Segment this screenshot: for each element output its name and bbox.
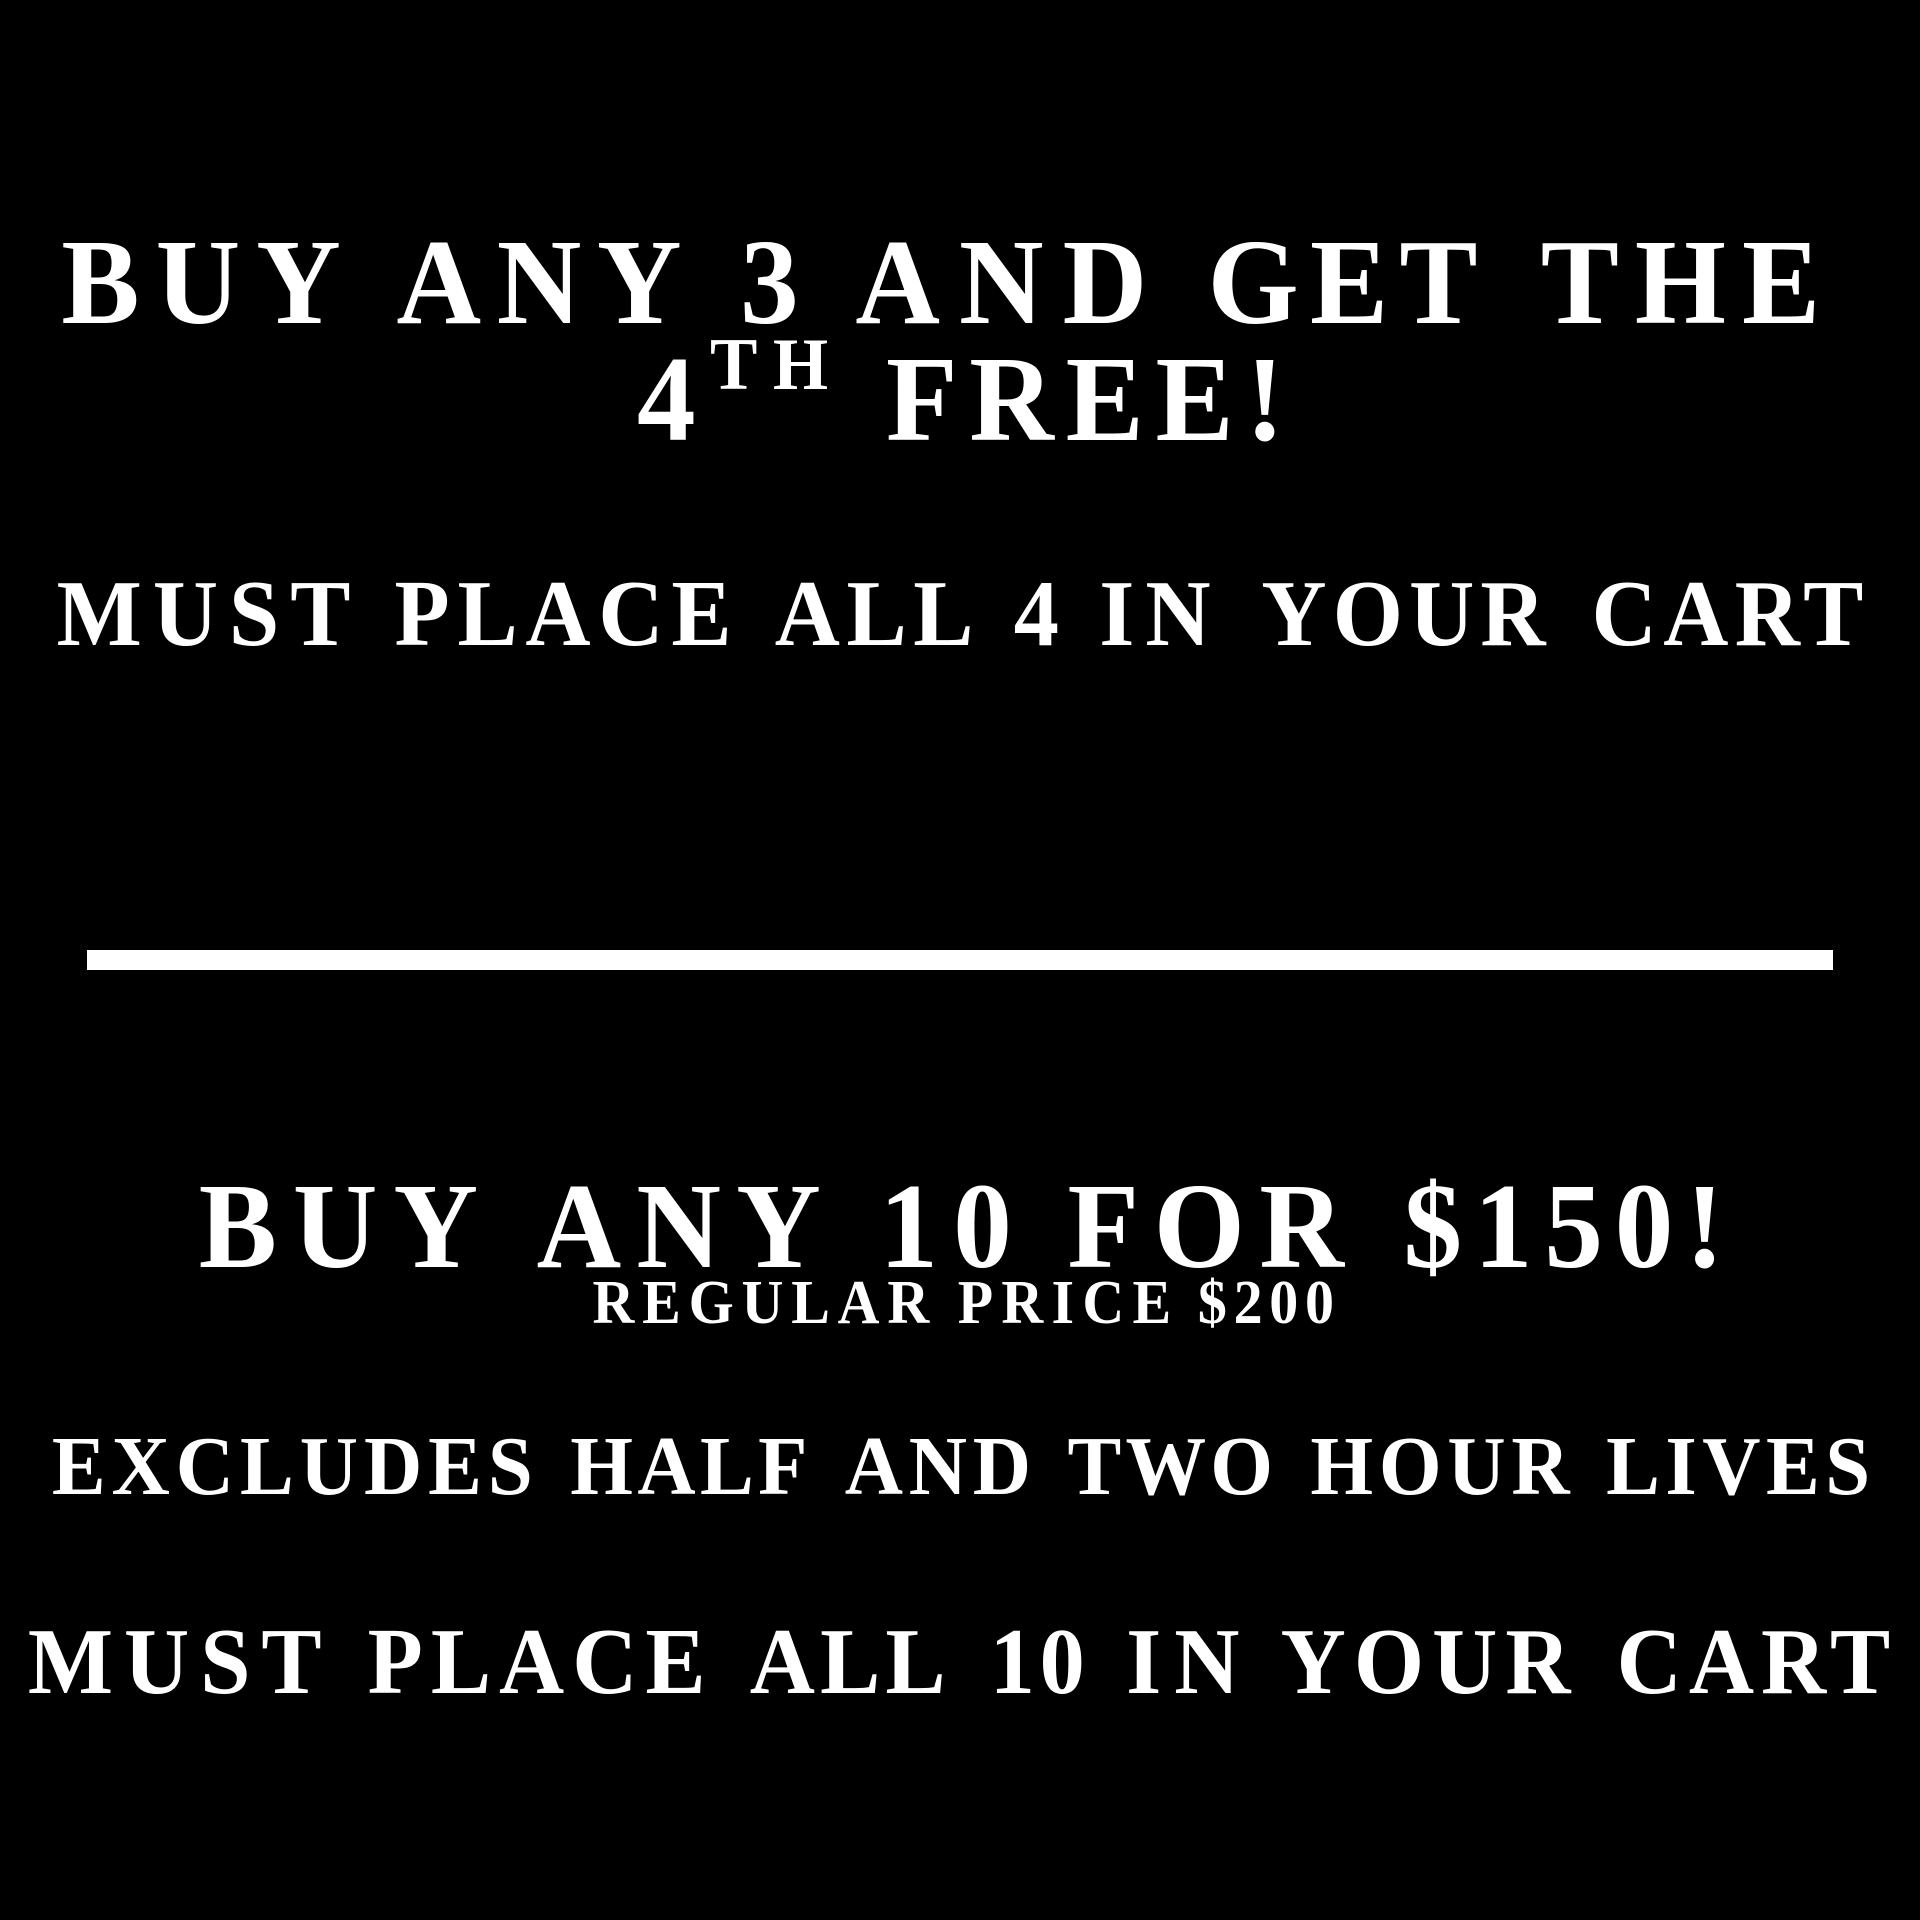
text: regular price: [592, 1268, 1334, 1338]
heading: buy any 3 offer line 2: [637, 323, 1284, 467]
text: must place all 4: YOUR: [1261, 561, 1547, 665]
text: must place all 10: MUST: [28, 1609, 322, 1713]
text: exclusions: EXCLUDES: [52, 1420, 533, 1512]
heading: buy any 10 offer: BUY: [199, 1158, 478, 1294]
text: must place all 4: [57, 561, 1863, 665]
heading: buy any 3 offer line 2: FREE!: [886, 331, 1284, 467]
text: must place all 10: CART: [1617, 1609, 1890, 1713]
heading: buy any 3 offer line 1: THE: [1541, 214, 1820, 350]
text: exclusions: HOUR: [1310, 1420, 1571, 1512]
heading: buy any 10 offer: ANY: [537, 1158, 821, 1294]
heading: buy any 3 offer line 1: [61, 214, 1820, 350]
text: exclusions: HALF: [570, 1420, 807, 1512]
heading: buy any 10 offer: $150!: [1404, 1158, 1724, 1294]
heading: buy any 3 offer line 2: TH: [710, 323, 828, 405]
text: exclusions: [52, 1420, 1870, 1512]
heading: buy any 3 offer line 1: BUY: [61, 214, 341, 350]
text: must place all 4: IN: [1099, 561, 1211, 665]
text: must place all 4: MUST: [57, 561, 350, 665]
text: regular price: REGULAR: [592, 1268, 930, 1338]
text: must place all 10: PLACE: [368, 1609, 706, 1713]
text: must place all 4: CART: [1592, 561, 1863, 665]
text: must place all 10: IN: [1126, 1609, 1239, 1713]
text: must place all 10: YOUR: [1281, 1609, 1572, 1713]
divider bar: [87, 950, 1833, 970]
text: must place all 10: 10: [990, 1609, 1085, 1713]
text: must place all 4: PLACE: [395, 561, 732, 665]
text: regular price: $200: [1198, 1268, 1334, 1338]
text: exclusions: TWO: [1068, 1420, 1273, 1512]
heading: buy any 3 offer line 1: AND: [855, 214, 1147, 350]
heading: buy any 3 offer line 1: GET: [1208, 214, 1477, 350]
heading: buy any 10 offer: FOR: [1068, 1158, 1346, 1294]
text: exclusions: AND: [845, 1420, 1031, 1512]
heading: buy any 10 offer: 10: [879, 1158, 1012, 1294]
heading: buy any 3 offer line 1: 3: [740, 214, 799, 350]
text: must place all 10: [28, 1609, 1890, 1713]
text: must place all 4: 4: [1014, 561, 1059, 665]
text: must place all 10: ALL: [750, 1609, 946, 1713]
heading: buy any 3 offer line 1: ANY: [396, 214, 682, 350]
text: must place all 4: ALL: [775, 561, 973, 665]
text: regular price: PRICE: [958, 1268, 1171, 1338]
text: exclusions: LIVES: [1606, 1420, 1870, 1512]
heading: buy any 3 offer line 2: 4: [637, 331, 696, 467]
heading: buy any 10 offer: [199, 1158, 1724, 1294]
